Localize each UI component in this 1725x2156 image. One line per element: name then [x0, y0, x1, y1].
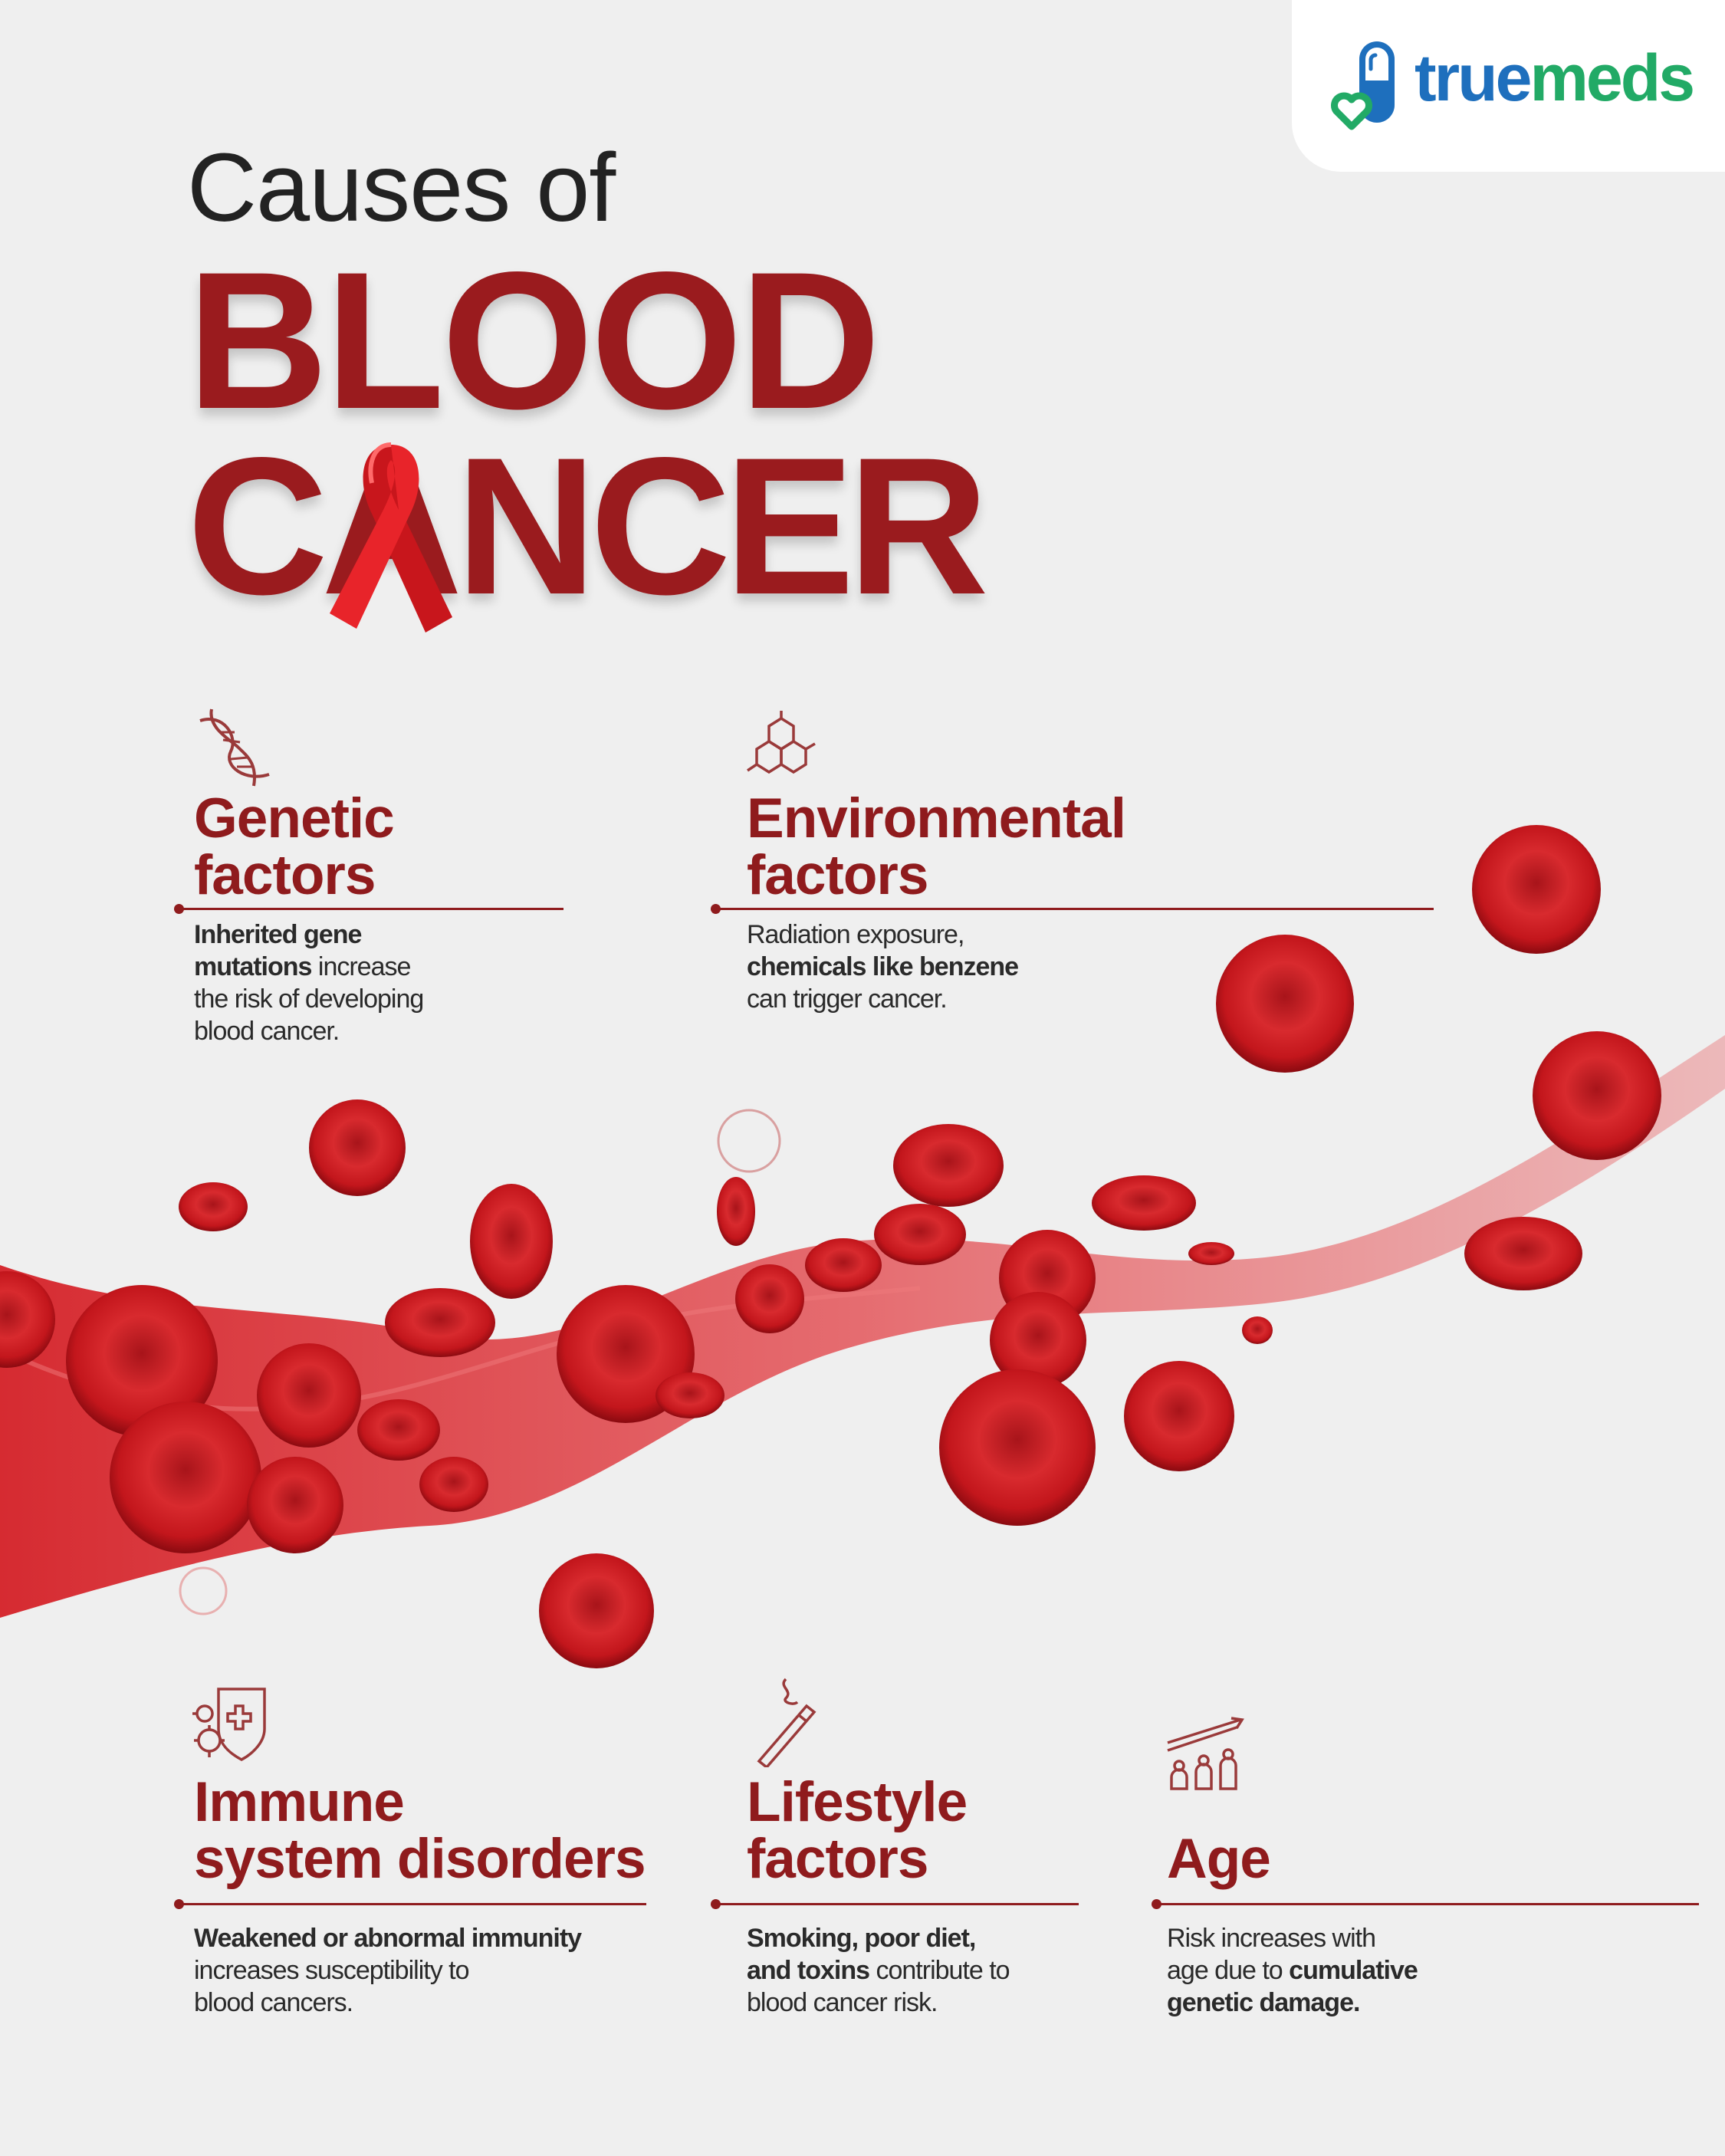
- heading: Immune: [194, 1771, 404, 1833]
- divider: [179, 908, 564, 910]
- icon: pill with heart: [1331, 41, 1395, 130]
- text: [194, 1924, 582, 2017]
- heading: factors: [747, 1828, 928, 1890]
- text: Weakened or abnormal immunity: [194, 1924, 581, 1953]
- icon: age growth: [1167, 1717, 1244, 1790]
- cells: [0, 825, 1661, 1668]
- text: Risk increases with: [1167, 1924, 1375, 1953]
- text: [747, 920, 1018, 1014]
- divider: [715, 1903, 1079, 1905]
- divider: [715, 908, 1434, 910]
- heading: [194, 787, 394, 906]
- text: the risk of developing: [194, 984, 423, 1014]
- heading: Genetic: [194, 787, 394, 850]
- heading: system disorders: [194, 1828, 646, 1890]
- panel: immune system disorders: [174, 1688, 646, 2017]
- heading: factors: [194, 844, 375, 906]
- divider: [1156, 1903, 1699, 1905]
- heading: [747, 787, 1125, 906]
- icon: shield: [192, 1688, 266, 1761]
- text: genetic damage.: [1167, 1988, 1359, 2017]
- heading: [194, 1771, 646, 1890]
- panel: lifestyle factors: [711, 1678, 1079, 2017]
- text: age due to cumulative: [1167, 1956, 1418, 1985]
- heading: Age: [1167, 1828, 1270, 1890]
- heading: factors: [747, 844, 928, 906]
- heading: Lifestyle: [747, 1771, 967, 1833]
- heading: Environmental: [747, 787, 1125, 850]
- text: Radiation exposure,: [747, 920, 964, 949]
- text: and toxins contribute to: [747, 1956, 1010, 1985]
- title: BLOOD: BLOOD: [187, 232, 878, 450]
- text: blood cancers.: [194, 1988, 353, 2017]
- text: mutations increase: [194, 952, 410, 981]
- logo panel: [1292, 0, 1725, 172]
- icon: awareness ribbon: [330, 442, 452, 633]
- panel: age: [1152, 1717, 1699, 2017]
- divider: [179, 1903, 646, 1905]
- icon: DNA: [199, 708, 270, 787]
- text: can trigger cancer.: [747, 984, 947, 1014]
- text: Inherited gene: [194, 920, 361, 949]
- text: [1167, 1924, 1418, 2017]
- icon: hexagons: [747, 711, 816, 774]
- panel: genetic factors: [174, 708, 564, 1046]
- title: Causes of: Causes of: [187, 133, 615, 242]
- text: [194, 920, 423, 1046]
- icon: cigarette: [757, 1678, 816, 1767]
- text: chemicals like benzene: [747, 952, 1018, 981]
- logo text: truemeds: [1414, 41, 1693, 115]
- text: blood cancer risk.: [747, 1988, 937, 2017]
- text: Smoking, poor diet,: [747, 1924, 975, 1953]
- stream: [0, 1035, 1725, 1618]
- title: CANCER: CANCER: [187, 417, 982, 636]
- text: [747, 1924, 1010, 2017]
- panel: environmental factors: [711, 711, 1434, 1014]
- text: blood cancer.: [194, 1017, 339, 1046]
- text: increases susceptibility to: [194, 1956, 469, 1985]
- heading: [747, 1771, 967, 1890]
